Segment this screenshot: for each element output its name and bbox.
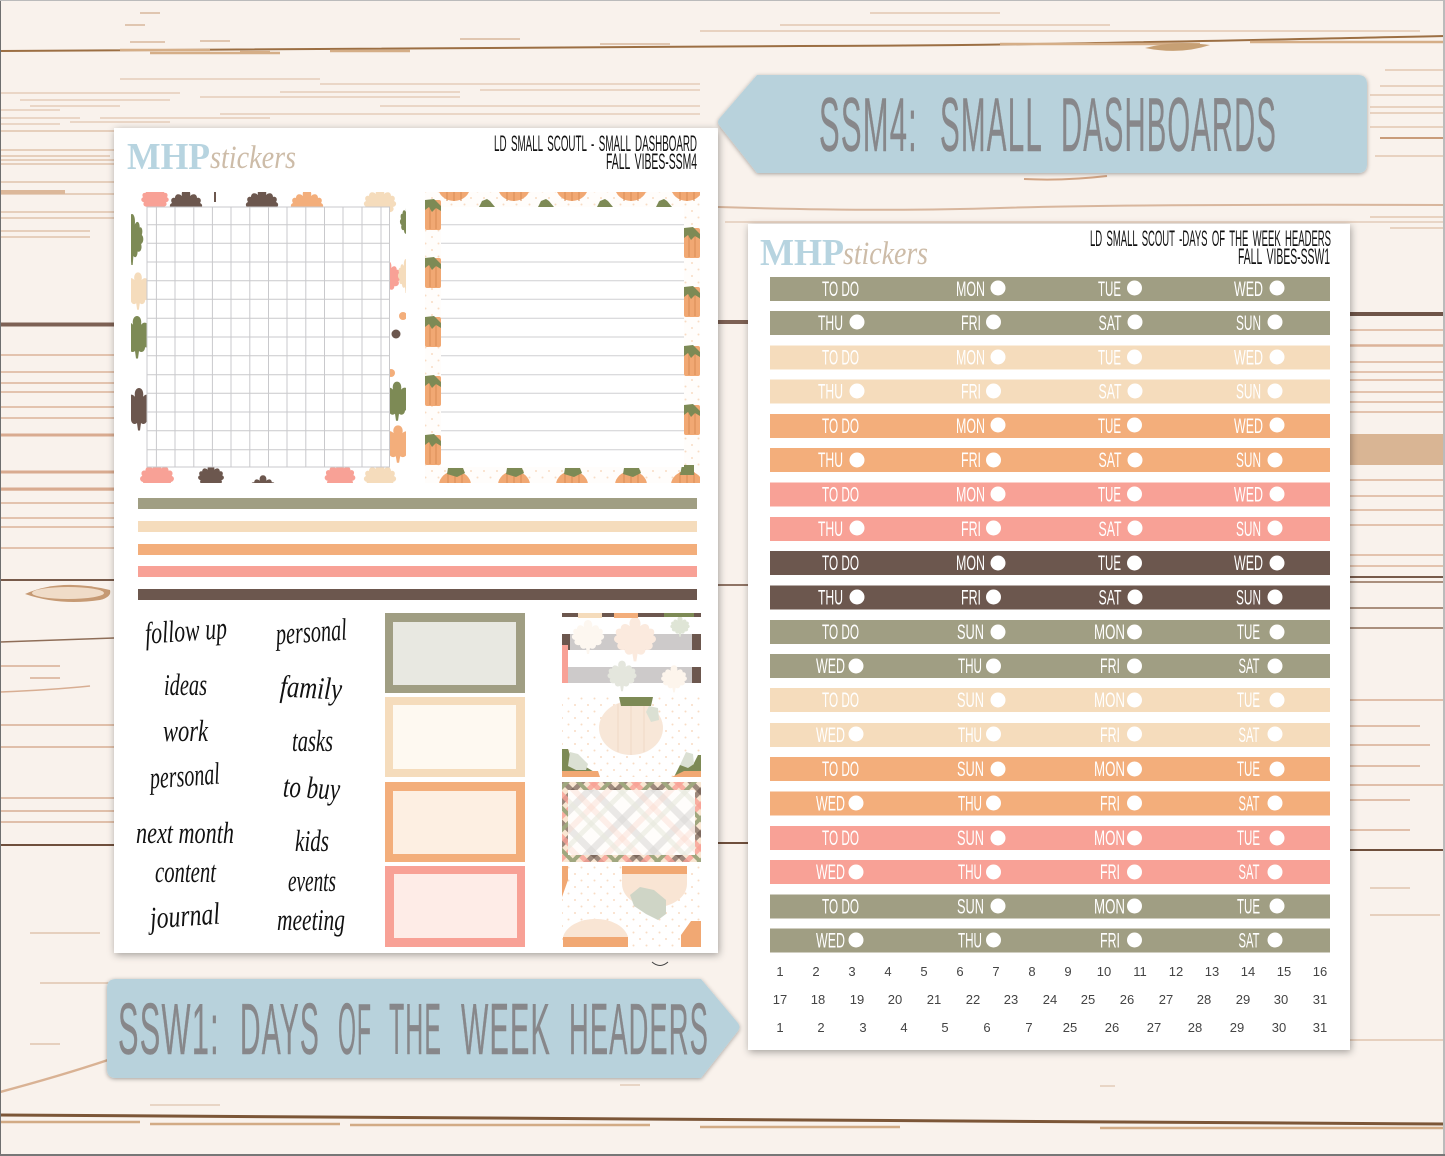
script word stickers: right column: personal — [273, 612, 348, 652]
header strip 7 — [770, 482, 1330, 506]
header strip 15: TO DO — [822, 758, 859, 781]
panel: leaf pattern grid note — [131, 192, 406, 483]
header strip 1 — [770, 277, 1330, 301]
logo: MHP stickers: MHP — [127, 136, 210, 178]
header strip 1: TUE — [1098, 278, 1121, 301]
header strip 3: TO DO — [822, 346, 859, 370]
script word stickers: right column — [273, 612, 348, 937]
header strip 13: SUN — [957, 689, 984, 712]
header strip 8: SAT — [1098, 518, 1122, 541]
sheet: SSW1 days of the week headers: FALL VIBES-SSW1 — [1238, 244, 1330, 269]
patterned tile: striped leaves — [562, 613, 701, 693]
date numbers row 3: 30 — [1272, 1020, 1286, 1035]
sheet title — [1090, 226, 1331, 269]
date numbers row 1: 7 — [992, 964, 1000, 979]
date numbers row 3: 31 — [1313, 1020, 1327, 1035]
date numbers row 1: 15 — [1277, 964, 1291, 979]
header strip 14: SAT — [1238, 724, 1260, 747]
logo: MHP stickers — [127, 136, 296, 178]
header strip 19: TUE — [1237, 896, 1260, 918]
header strip 6: THU — [818, 449, 843, 472]
header strip 17: MON — [1094, 827, 1125, 850]
header strip 16 — [770, 792, 1330, 816]
header strip 20: FRI — [1100, 930, 1120, 952]
header strip 18: WED — [816, 861, 845, 884]
banner: SSW1 days of the week headers: THE — [389, 990, 442, 1070]
script word stickers: left column — [136, 610, 234, 936]
header strip 12: FRI — [1100, 655, 1120, 678]
header strip 15 — [770, 757, 1330, 781]
date numbers row 2: 28 — [1197, 992, 1211, 1007]
header strip 9: WED — [1234, 552, 1263, 575]
header strip 13: TUE — [1237, 689, 1260, 712]
header strip 12: SAT — [1238, 655, 1260, 678]
panel: pumpkin border lined note — [425, 192, 700, 483]
logo: MHP stickers: stickers — [210, 140, 296, 176]
header strip 16: SAT — [1238, 792, 1260, 816]
header strip 2: SUN — [1236, 312, 1261, 335]
date numbers row 1: 5 — [920, 964, 928, 979]
header strip 15: MON — [1094, 758, 1125, 781]
header strip 1: MON — [956, 278, 985, 301]
header strip 17 — [770, 826, 1330, 850]
header strip 8: SUN — [1236, 518, 1261, 541]
header strip 10: FRI — [961, 586, 981, 610]
header strip 5: TUE — [1098, 415, 1121, 438]
header strip 11: MON — [1094, 621, 1125, 644]
script word stickers: left column: personal — [147, 756, 221, 795]
script word stickers: right column: to buy — [282, 769, 341, 807]
header strip 9: TUE — [1098, 552, 1121, 575]
patterned tile: plaid — [562, 782, 701, 862]
date numbers row 3: 1 — [776, 1020, 784, 1035]
date numbers row 2: 26 — [1120, 992, 1134, 1007]
header strip 13 — [770, 688, 1330, 712]
header strip 6: SUN — [1236, 449, 1261, 472]
date numbers row 2: 19 — [850, 992, 864, 1007]
header strip 4 — [770, 380, 1330, 404]
header strip 5: TO DO — [822, 415, 859, 438]
header strip 11: SUN — [957, 621, 984, 644]
script word stickers: right column: meeting — [277, 902, 345, 937]
sheet: SSM4 small dashboard: FALL VIBES-SSM4 — [606, 149, 697, 174]
date numbers row 1: 4 — [884, 964, 892, 979]
header strip 17: TUE — [1237, 827, 1260, 850]
curl mark under sheet — [652, 962, 668, 966]
header strip 2: FRI — [961, 312, 981, 335]
header strip 3: TUE — [1098, 346, 1121, 370]
header strip 8: FRI — [961, 518, 981, 541]
date numbers row 1: 14 — [1241, 964, 1255, 979]
header strip 20 — [770, 928, 1330, 952]
header strip 10 — [770, 586, 1330, 610]
header strip 8 — [770, 517, 1330, 541]
script word stickers: left column: journal — [146, 896, 221, 936]
banner: SSW1 days of the week headers — [107, 979, 740, 1078]
patterned tile: orange pumpkins — [562, 866, 701, 947]
header strip 14 — [770, 723, 1330, 747]
header strip 4: SUN — [1236, 380, 1261, 404]
header strip 4: FRI — [961, 380, 981, 404]
header strip 6: SAT — [1098, 449, 1122, 472]
header strip 15: SUN — [957, 758, 984, 781]
header strip 2 — [770, 311, 1330, 335]
header strip 19: SUN — [957, 896, 984, 918]
header strip 7: TUE — [1098, 484, 1121, 506]
header strip 20: THU — [958, 930, 982, 952]
date numbers row 2: 18 — [811, 992, 825, 1007]
date numbers row 2: 24 — [1043, 992, 1057, 1007]
header strip 3: WED — [1234, 346, 1263, 370]
sheet title — [494, 131, 697, 174]
script word stickers: right column: tasks — [292, 723, 333, 758]
header strip 16: WED — [816, 792, 845, 816]
header strip 20: WED — [816, 930, 845, 952]
colour strips — [138, 498, 697, 600]
header strip 19 — [770, 894, 1330, 918]
header strip 18: THU — [958, 861, 982, 884]
date numbers row 2: 25 — [1081, 992, 1095, 1007]
date numbers row 3: 5 — [941, 1020, 949, 1035]
script word stickers: left column: content — [155, 854, 217, 889]
date numbers row 2: 27 — [1159, 992, 1173, 1007]
header strip 9: TO DO — [822, 552, 859, 575]
logo: MHP stickers: stickers — [843, 236, 928, 272]
header strip 12: WED — [816, 655, 845, 678]
header strip 7: WED — [1234, 484, 1263, 506]
date numbers row 1 — [776, 964, 1327, 979]
script word stickers: right column: kids — [295, 823, 329, 858]
header strip 18: FRI — [1100, 861, 1120, 884]
header strip 5: WED — [1234, 415, 1263, 438]
date numbers row 3: 29 — [1230, 1020, 1244, 1035]
header strip 19: TO DO — [822, 896, 859, 918]
header strip 15: TUE — [1237, 758, 1260, 781]
date numbers row 2: 31 — [1313, 992, 1327, 1007]
header strip 19: MON — [1094, 896, 1125, 918]
date numbers row 1: 2 — [812, 964, 820, 979]
date numbers row 3: 3 — [859, 1020, 867, 1035]
banner: SSM4 small dashboards — [718, 75, 1367, 173]
date numbers row 3: 26 — [1105, 1020, 1119, 1035]
framed boxes — [385, 613, 525, 947]
header strip 6 — [770, 448, 1330, 472]
date numbers row 1: 3 — [848, 964, 856, 979]
banner: SSW1 days of the week headers: WEEK — [461, 990, 551, 1070]
date numbers row 1: 11 — [1133, 964, 1147, 979]
date numbers row 2: 23 — [1004, 992, 1018, 1007]
logo: MHP stickers — [760, 232, 928, 274]
header strip 8: THU — [818, 518, 843, 541]
header strip 4: SAT — [1098, 380, 1122, 404]
date numbers row 2: 17 — [773, 992, 787, 1007]
header strip 16: THU — [958, 792, 982, 816]
header strip 17: SUN — [957, 827, 984, 850]
header strip 1: WED — [1234, 278, 1263, 301]
header strip 16: FRI — [1100, 792, 1120, 816]
header strip 14: FRI — [1100, 724, 1120, 747]
date numbers row 3 — [776, 1020, 1327, 1035]
date numbers row 3: 6 — [983, 1020, 991, 1035]
header strip 7: MON — [956, 484, 985, 506]
header strip 13: MON — [1094, 689, 1125, 712]
header strip 3 — [770, 346, 1330, 370]
header strip 5 — [770, 414, 1330, 438]
date numbers row 2: 22 — [966, 992, 980, 1007]
patterned tile: pale pumpkin — [562, 697, 701, 777]
header strip 7: TO DO — [822, 484, 859, 506]
script word stickers: left column: follow up — [144, 610, 228, 651]
header strip 10: THU — [818, 586, 843, 610]
sheet: SSW1 days of the week headers — [748, 224, 1350, 1050]
header strip 18 — [770, 860, 1330, 884]
header strip 3: MON — [956, 346, 985, 370]
date numbers row 1: 1 — [776, 964, 784, 979]
header strip 11: TUE — [1237, 621, 1260, 644]
banner: SSW1 days of the week headers: OF — [338, 990, 372, 1070]
header strip 10: SAT — [1098, 586, 1122, 610]
date numbers row 2: 30 — [1274, 992, 1288, 1007]
banner: SSM4 small dashboards: SMALL — [940, 83, 1043, 168]
date numbers row 1: 6 — [956, 964, 964, 979]
date numbers row 3: 25 — [1063, 1020, 1077, 1035]
date numbers row 3: 2 — [817, 1020, 825, 1035]
header strip 6: FRI — [961, 449, 981, 472]
header strip 9: MON — [956, 552, 985, 575]
header strip 18: SAT — [1238, 861, 1260, 884]
header strip 5: MON — [956, 415, 985, 438]
date numbers row 2: 21 — [927, 992, 941, 1007]
header strip 14: WED — [816, 724, 845, 747]
header strip 10: SUN — [1236, 586, 1261, 610]
date numbers row 2 — [773, 992, 1327, 1007]
header strip 2: SAT — [1098, 312, 1122, 335]
date numbers row 3: 28 — [1188, 1020, 1202, 1035]
note lines — [441, 207, 684, 467]
sheet: SSM4 small dashboard — [114, 128, 718, 966]
header strip 14: THU — [958, 724, 982, 747]
banner: SSW1 days of the week headers: SSW1: — [118, 990, 220, 1070]
script word stickers: left column: next month — [136, 815, 234, 850]
header strip 11: TO DO — [822, 621, 859, 644]
text: HEADERS — [569, 990, 709, 1070]
header strip 1: TO DO — [822, 278, 859, 301]
header strip 13: TO DO — [822, 689, 859, 712]
banner: SSM4 small dashboards: SSM4: — [819, 83, 918, 168]
header strip 9 — [770, 551, 1330, 575]
script word stickers: left column: work — [163, 713, 209, 748]
date numbers row 1: 10 — [1097, 964, 1111, 979]
header strip 12 — [770, 654, 1330, 678]
date numbers row 1: 12 — [1169, 964, 1183, 979]
date numbers row 2: 20 — [888, 992, 902, 1007]
banner: SSW1 days of the week headers: DAYS — [240, 990, 320, 1070]
header strip 11 — [770, 620, 1330, 644]
date numbers row 3: 7 — [1025, 1020, 1033, 1035]
header strip 12: THU — [958, 655, 982, 678]
header strip 20: SAT — [1238, 930, 1260, 952]
script word stickers: right column: family — [279, 668, 343, 707]
date numbers row 1: 13 — [1205, 964, 1219, 979]
date numbers row 1: 16 — [1313, 964, 1327, 979]
script word stickers: right column: events — [288, 863, 336, 898]
script word stickers: left column: ideas — [164, 667, 207, 702]
date numbers row 3: 4 — [900, 1020, 908, 1035]
note grid — [147, 207, 390, 467]
date numbers row 2: 29 — [1236, 992, 1250, 1007]
date numbers row 1: 9 — [1064, 964, 1072, 979]
header strip 17: TO DO — [822, 827, 859, 850]
text: LD SMALL SCOUTL - SMALL DASHBOARD — [494, 131, 697, 156]
header strip 4: THU — [818, 380, 843, 404]
logo: MHP stickers: MHP — [760, 232, 844, 274]
date numbers row 3: 27 — [1147, 1020, 1161, 1035]
header strip 2: THU — [818, 312, 843, 335]
date numbers row 1: 8 — [1028, 964, 1036, 979]
